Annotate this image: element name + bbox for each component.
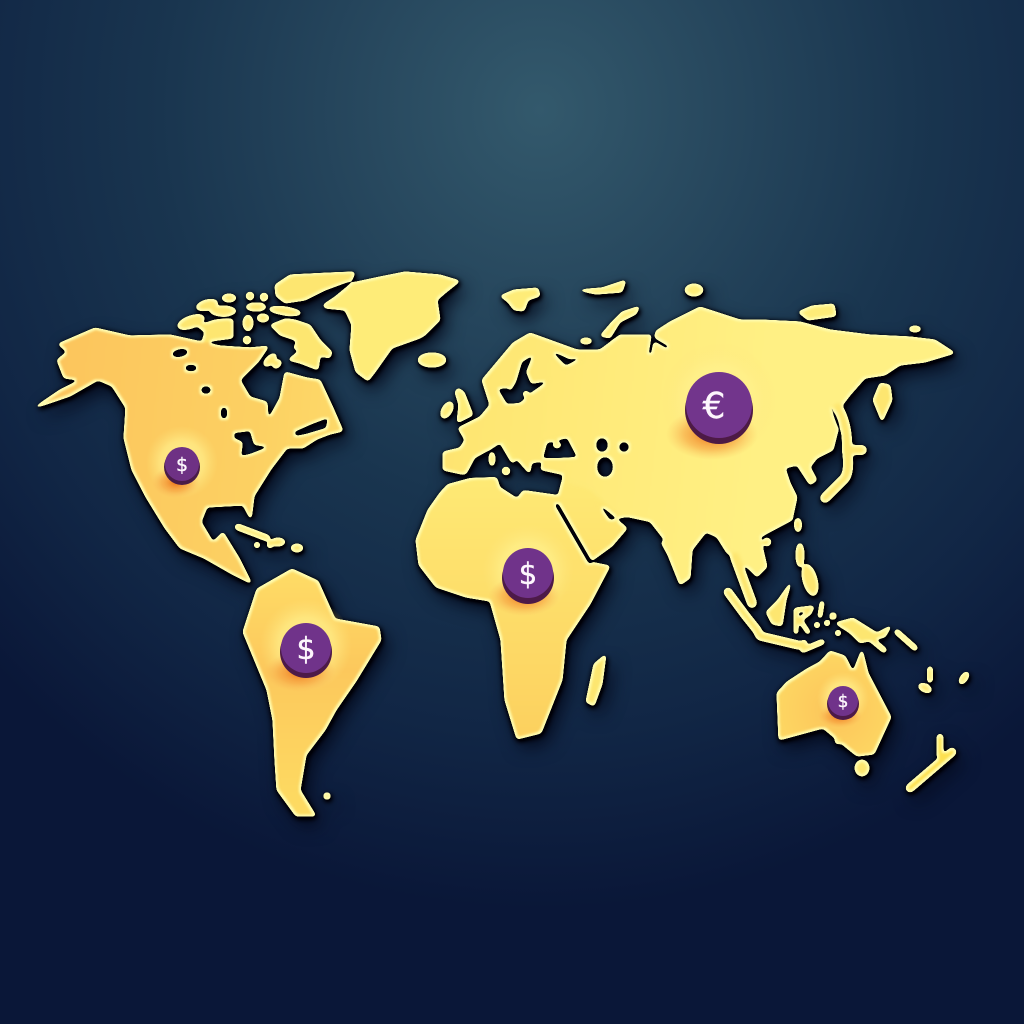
landmass: northern Eurasian islands bbox=[500, 280, 921, 338]
landmass: Caribbean islands bbox=[238, 527, 303, 552]
landmass: Arctic islands bbox=[176, 272, 355, 370]
landmass: Japan and Kamchatka bbox=[825, 383, 892, 498]
marker: Mexico dollar coin: $ bbox=[176, 454, 188, 476]
landmass: Southeast Asia and Indonesia bbox=[728, 518, 892, 650]
landmass: New Zealand and Pacific islands bbox=[324, 632, 971, 800]
landmass: Iceland bbox=[418, 353, 446, 367]
marker: Mexico dollar coin bbox=[146, 426, 218, 498]
marker: Australia dollar coin: $ bbox=[838, 692, 848, 712]
landmass: Africa and Arabia bbox=[416, 474, 630, 739]
landmass: Australia bbox=[777, 649, 891, 756]
marker: Africa dollar coin bbox=[482, 524, 574, 616]
landmass: British Isles and European islands bbox=[438, 338, 592, 475]
world map bbox=[32, 272, 971, 816]
landmass: North America bbox=[32, 328, 343, 584]
marker: Asia euro coin bbox=[661, 342, 777, 460]
marker: South America dollar coin: $ bbox=[296, 632, 316, 667]
continents with carved seas bbox=[32, 307, 955, 739]
landmass: Madagascar bbox=[586, 654, 606, 706]
landmass: Eurasia bbox=[443, 307, 955, 585]
marker: South America dollar coin bbox=[260, 599, 352, 692]
marker: Asia euro coin: € bbox=[703, 386, 725, 427]
marker: Australia dollar coin bbox=[817, 672, 869, 728]
marker: Africa dollar coin: $ bbox=[519, 557, 537, 591]
landmass: Greenland bbox=[323, 272, 460, 381]
landmass: South America bbox=[243, 569, 381, 816]
